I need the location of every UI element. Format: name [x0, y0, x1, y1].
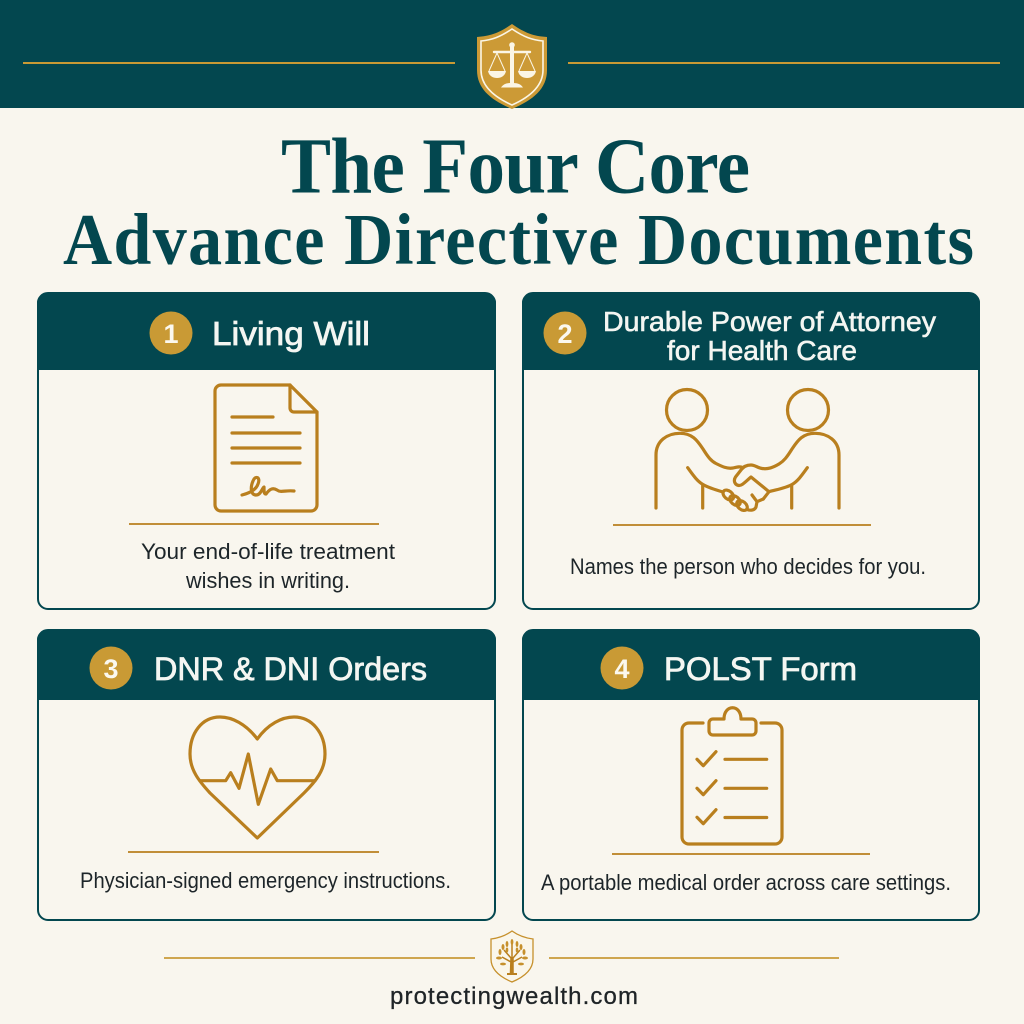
icon: scales of justice shield [477, 24, 547, 109]
panel: durable power of attorney [522, 293, 980, 609]
icon: handshake [656, 390, 839, 512]
icon: heart with pulse [190, 717, 325, 838]
number badge 2: 2 [557, 319, 573, 349]
panel: polst form [522, 630, 980, 920]
number badge 1 [150, 312, 192, 354]
icon: clipboard checklist [682, 708, 782, 844]
heading: durable power of attorney: for Health Care [667, 335, 857, 366]
number badge 4: 4 [614, 654, 630, 684]
number badge 2 [544, 312, 586, 354]
description: living will: Your end-of-life treatment [141, 539, 396, 564]
heading: living will: Living Will [212, 315, 370, 352]
icon: tree shield [491, 931, 533, 982]
number badge 3: 3 [103, 654, 119, 684]
description: polst form: A portable medical order across care settings. [541, 870, 951, 895]
heading: dnr and dni orders: DNR & DNI Orders [154, 651, 427, 687]
description: durable power of attorney: Names the person who decides for you. [570, 554, 926, 579]
description: dnr and dni orders: Physician-signed emergency instructions. [80, 868, 451, 893]
heading: durable power of attorney: Durable Power of Attorney [603, 306, 936, 337]
heading: durable power of attorney [603, 306, 936, 366]
panel: living will [37, 293, 496, 609]
header band [0, 0, 1024, 108]
title [63, 122, 974, 281]
footer dividers [164, 957, 839, 959]
website url: protectingwealth.com [390, 983, 638, 1010]
description: living will [141, 539, 396, 593]
panel: dnr and dni orders [37, 630, 496, 920]
title: Advance Directive Documents [63, 200, 974, 281]
description: living will: wishes in writing. [185, 568, 350, 593]
heading: polst form: POLST Form [664, 651, 857, 687]
title: The Four Core [281, 122, 750, 210]
icon: signed document [215, 385, 317, 511]
number badge 3 [90, 646, 132, 690]
number badge 4 [600, 646, 644, 690]
number badge 1: 1 [163, 319, 179, 349]
